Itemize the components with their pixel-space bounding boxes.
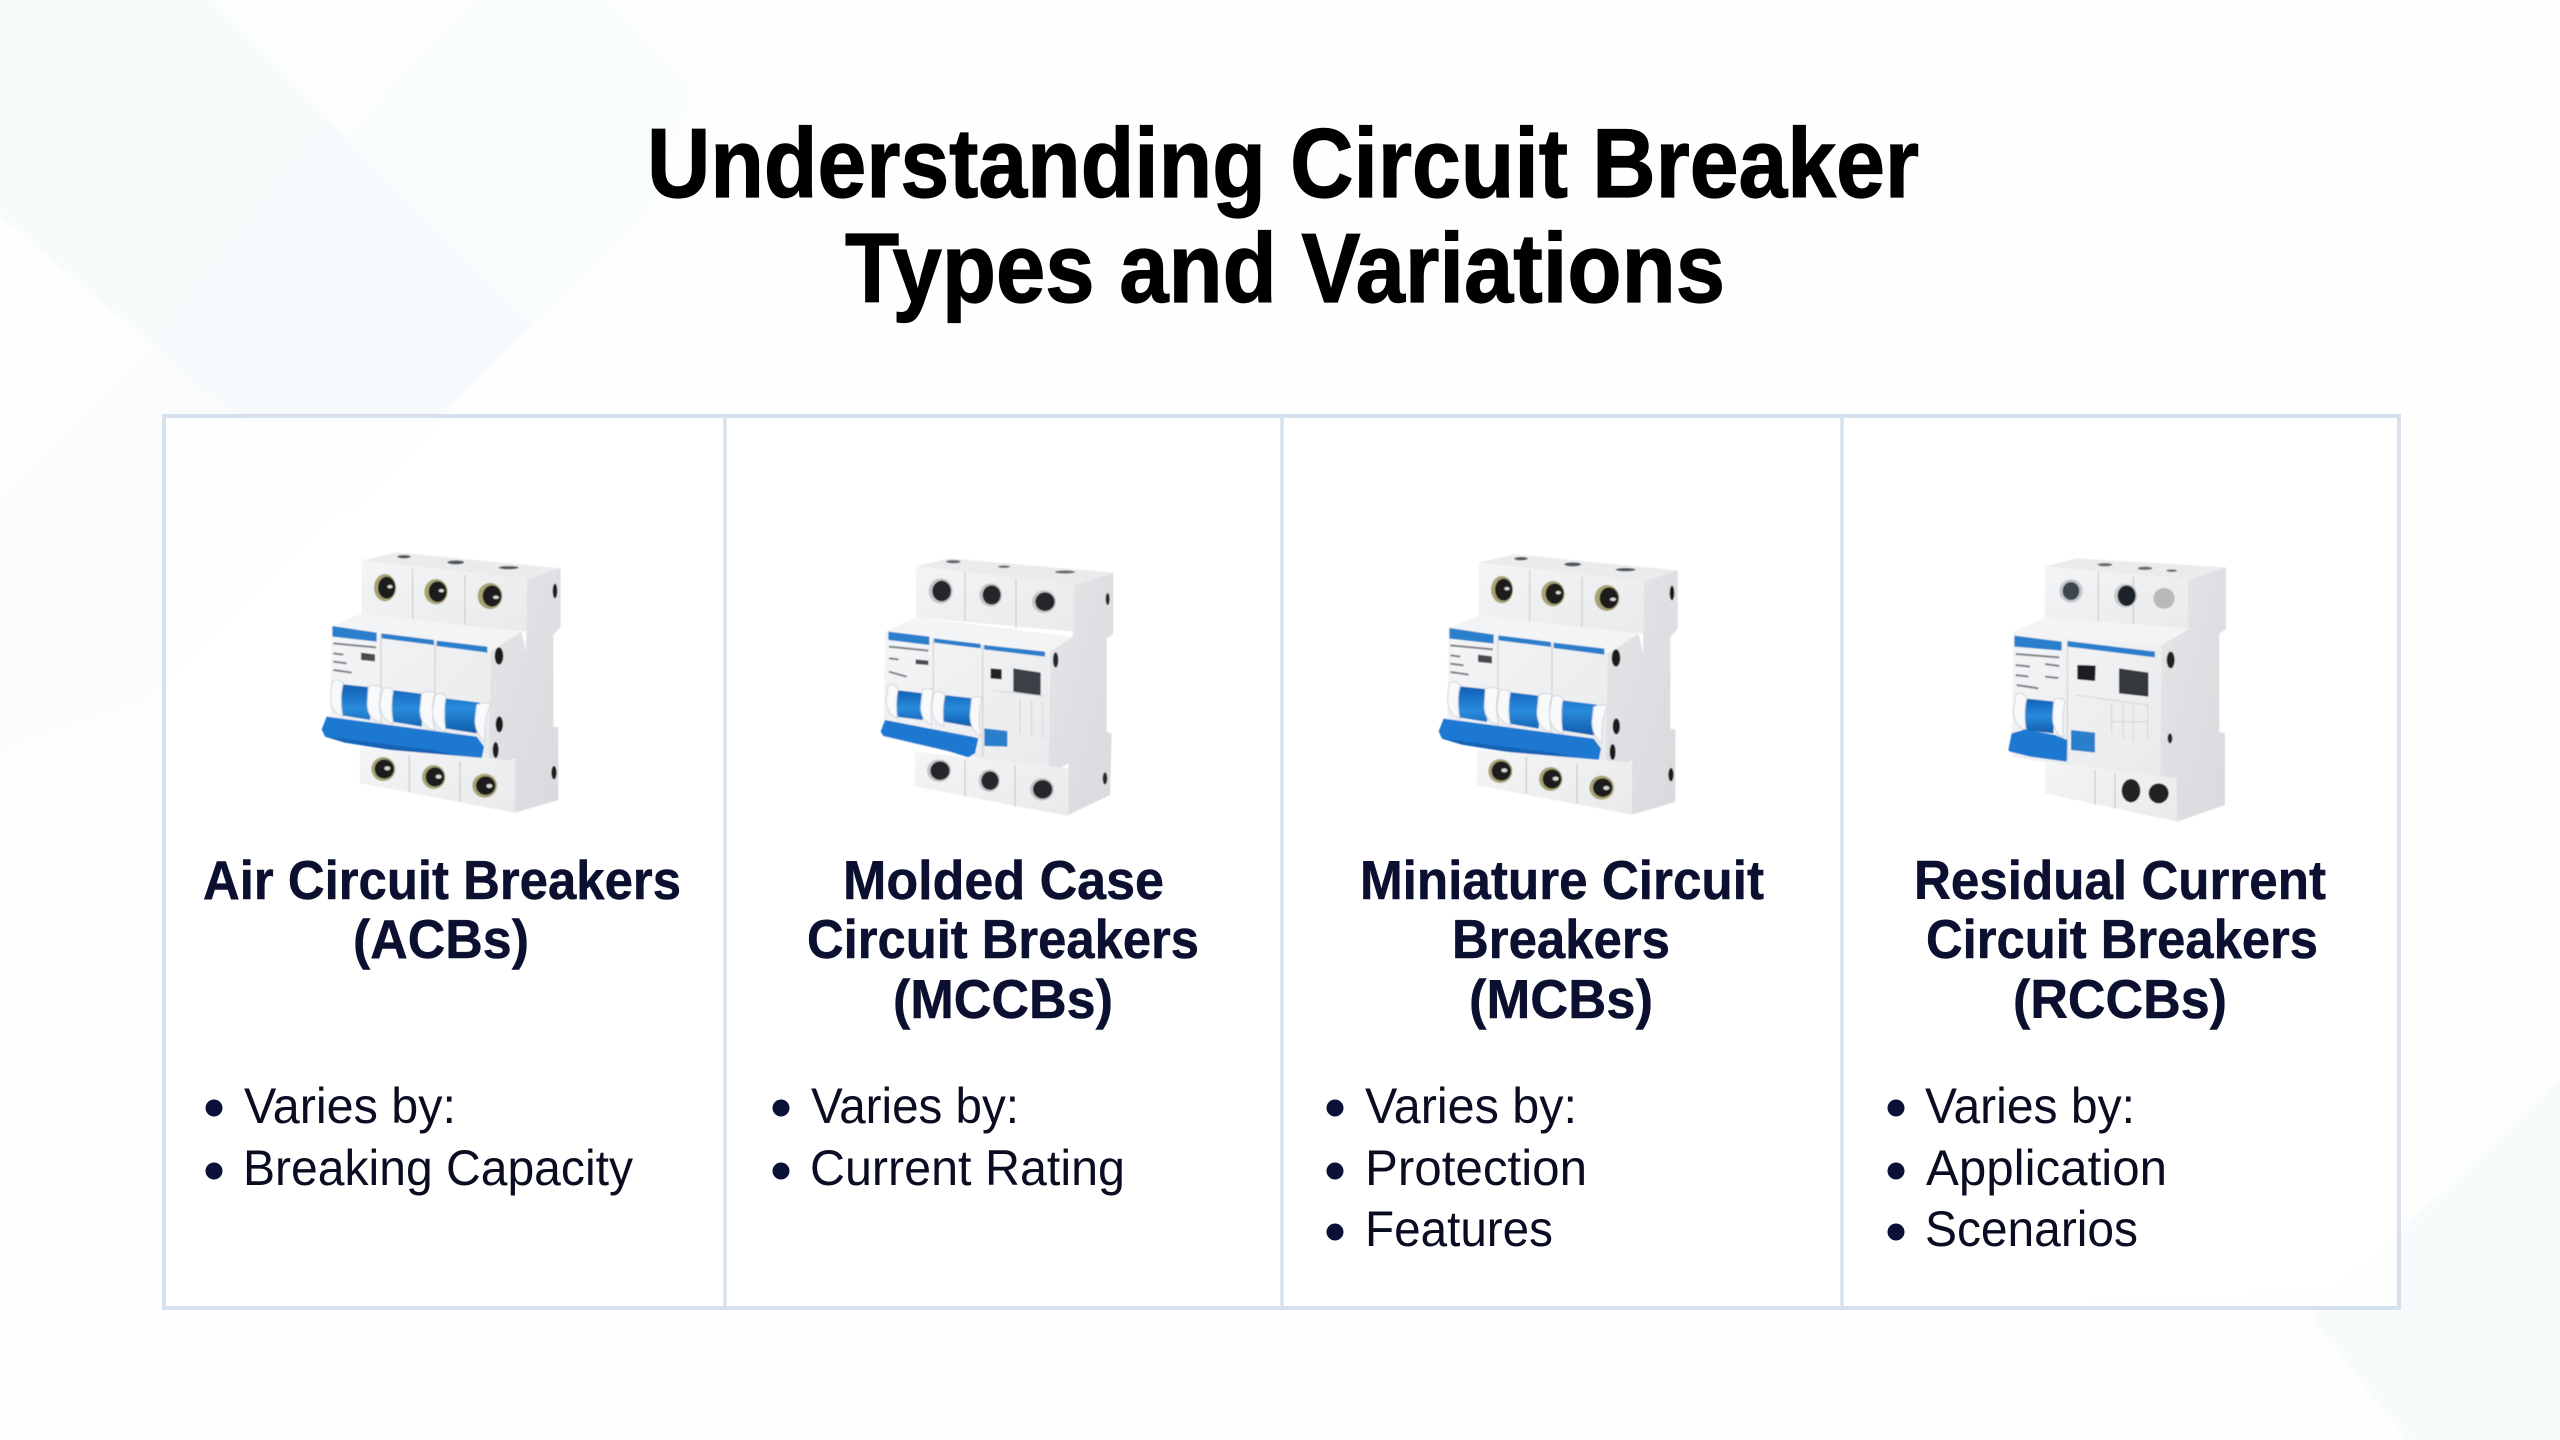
heading: MCBs: [1360, 849, 1764, 1030]
list: MCCB variations: Current Rating: [810, 1140, 1125, 1196]
list: MCB variations: Protection: [1365, 1140, 1587, 1196]
list: RCCB variations: Scenarios: [1925, 1201, 2138, 1257]
list: MCB variations: [1326, 1078, 1587, 1257]
heading: MCCBs: [807, 849, 1199, 1030]
heading: RCCBs: Residual Current: [1914, 849, 2326, 911]
heading: ACBs: [203, 849, 681, 970]
heading: MCCBs: (MCCBs): [893, 968, 1113, 1030]
icon: two-module residual current breaker: [2008, 558, 2226, 822]
list: MCB variations: Varies by:: [1365, 1078, 1577, 1134]
heading: ACBs: (ACBs): [353, 908, 529, 970]
heading: RCCBs: Circuit Breakers: [1926, 908, 2318, 970]
list: MCCB variations: Varies by:: [811, 1078, 1019, 1134]
heading: MCBs: Breakers: [1452, 908, 1670, 970]
icon: three-pole breaker: [322, 552, 561, 813]
heading: RCCBs: [1914, 849, 2326, 1030]
list: ACB variations: Varies by:: [244, 1078, 456, 1134]
panel: Miniature Circuit Breakers: [1326, 554, 1764, 1257]
list: RCCB variations: Varies by:: [1925, 1078, 2135, 1134]
list: ACB variations: [206, 1078, 633, 1196]
list: MCB variations: Features: [1365, 1201, 1553, 1257]
title: Types and Variations: [845, 213, 1725, 323]
title: Understanding Circuit Breaker: [647, 108, 1919, 218]
heading: ACBs: Air Circuit Breakers: [203, 849, 681, 911]
list: ACB variations: Breaking Capacity: [243, 1140, 633, 1196]
heading: RCCBs: (RCCBs): [2013, 968, 2227, 1030]
list: MCCB variations: [772, 1078, 1125, 1196]
comparison table panel: [164, 416, 2399, 1308]
icon: breaker with residual module: [881, 558, 1113, 816]
heading: MCCBs: Circuit Breakers: [807, 908, 1199, 970]
heading: MCBs: (MCBs): [1469, 968, 1653, 1030]
heading: MCCBs: Molded Case: [843, 849, 1164, 911]
list: RCCB variations: Application: [1926, 1140, 2167, 1196]
panel: Molded Case Circuit Breakers: [772, 558, 1199, 1196]
heading: MCBs: Miniature Circuit: [1360, 849, 1764, 911]
panel: Air Circuit Breakers: [203, 552, 681, 1196]
title: [647, 108, 1919, 323]
panel: Residual Current Circuit Breakers: [1888, 558, 2326, 1257]
icon: three-pole miniature breaker: [1439, 554, 1678, 815]
list: RCCB variations: [1888, 1078, 2167, 1257]
